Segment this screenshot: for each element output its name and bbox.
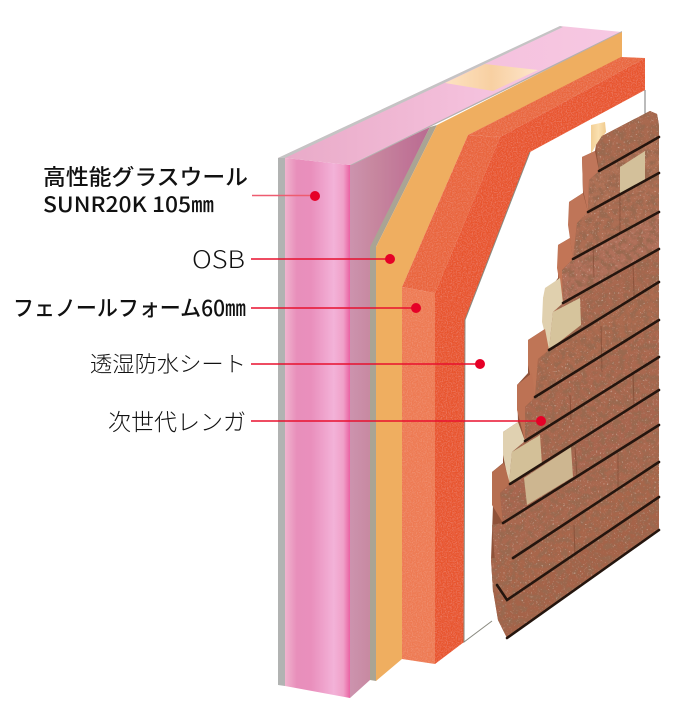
label: phenolic foam: フェノールフォーム60㎜ xyxy=(13,291,246,323)
next-generation brick cladding xyxy=(491,111,659,638)
label: OSB: OSB xyxy=(192,240,245,275)
wood stud xyxy=(591,122,606,154)
mortar shadow lines xyxy=(497,137,659,638)
label: breathable waterproof sheet: 透湿防水シート xyxy=(90,347,246,379)
cream bricks xyxy=(509,151,645,505)
label: glass wool: SUNR20K 105㎜ xyxy=(43,189,214,219)
leader: OSB xyxy=(251,254,395,264)
leader: phenolic foam xyxy=(251,303,421,313)
vertical brick joints xyxy=(570,195,634,556)
label: next-generation brick: 次世代レンガ xyxy=(108,403,246,437)
label: glass wool xyxy=(43,160,248,219)
brick end faces xyxy=(492,151,599,523)
brick faces xyxy=(491,111,659,638)
phenolic foam layer xyxy=(402,57,645,664)
OSB board layer xyxy=(370,32,622,681)
leader: breathable sheet xyxy=(251,359,485,369)
leader: glass wool xyxy=(252,191,320,201)
breathable waterproof sheet edge xyxy=(464,90,645,642)
brick base silhouette xyxy=(491,111,659,638)
glass wool insulation layer xyxy=(278,26,622,698)
label: glass wool: 高性能グラスウール xyxy=(43,160,248,192)
leader: brick xyxy=(251,416,546,426)
